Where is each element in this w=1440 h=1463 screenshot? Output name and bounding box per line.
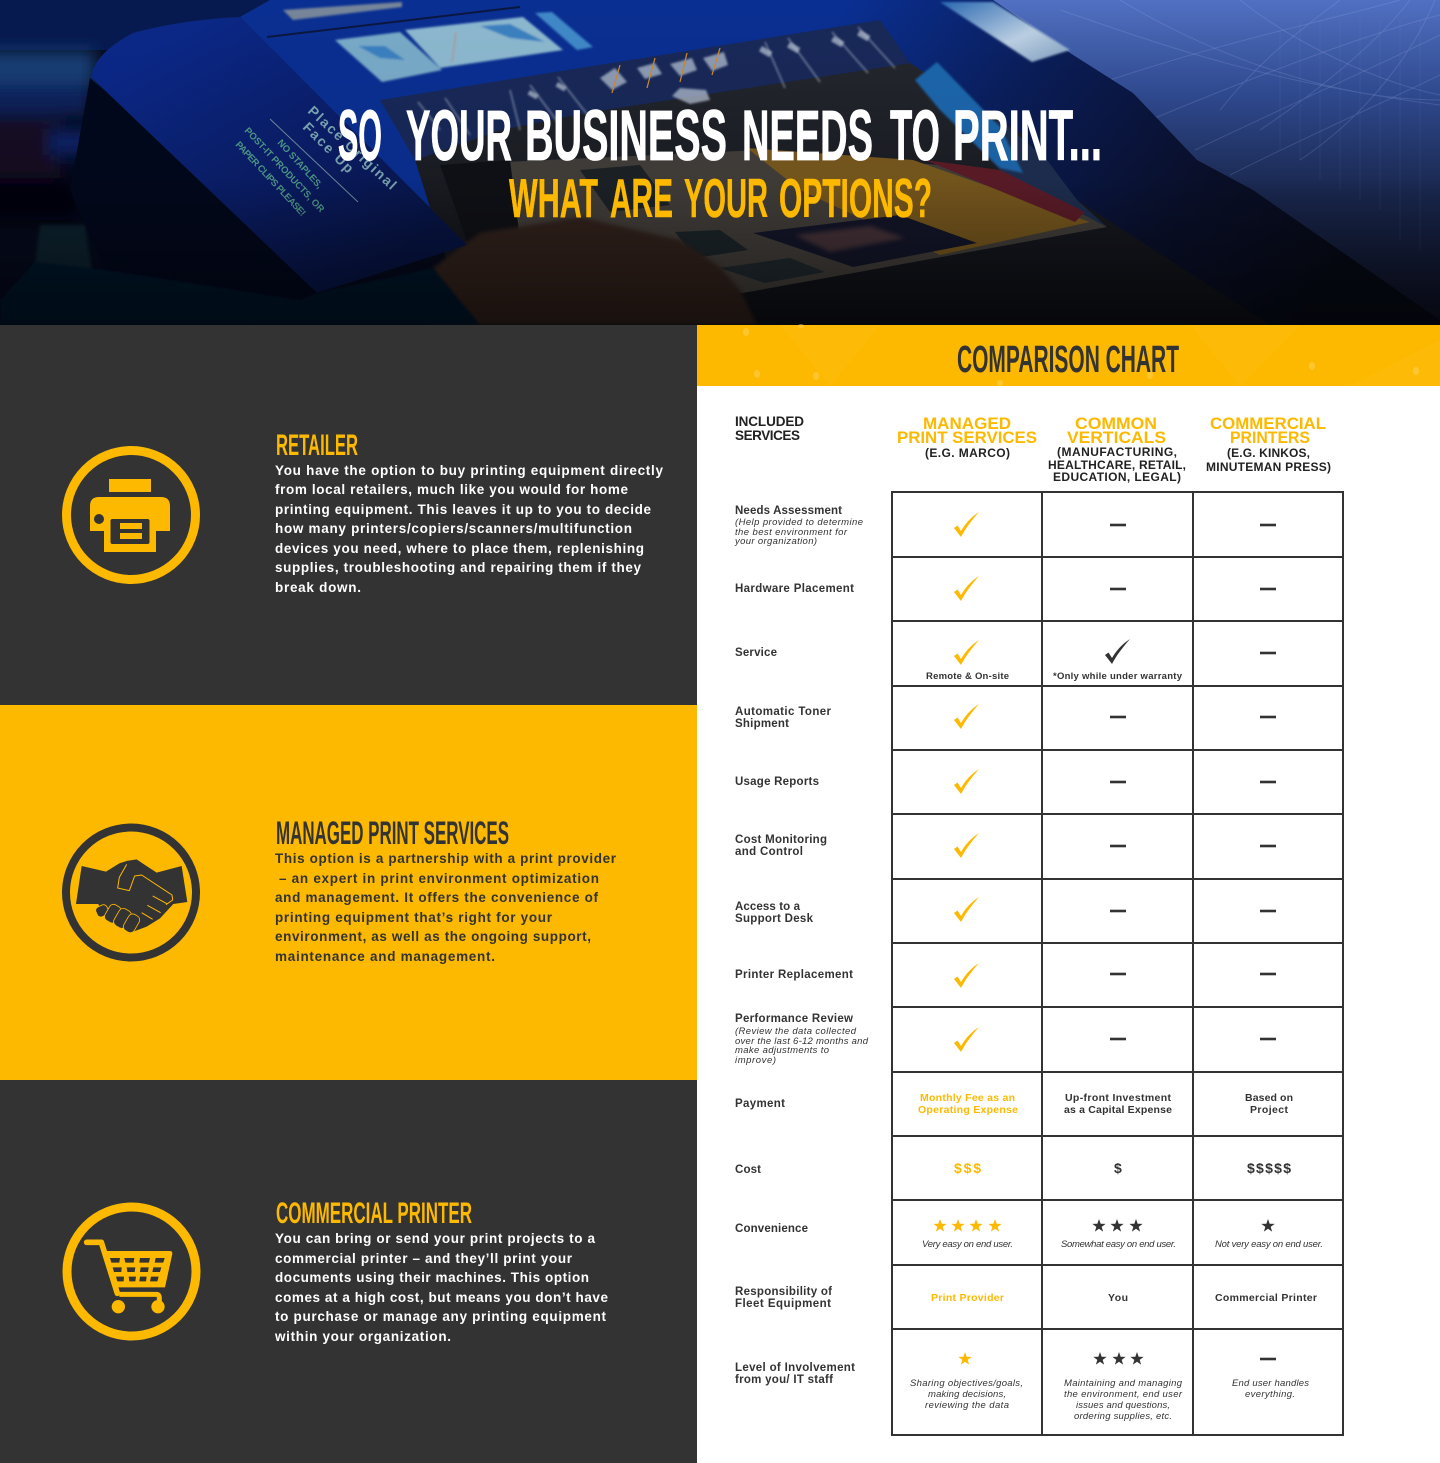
header: common verticals: VERTICALS	[1067, 428, 1166, 447]
panel: commercial printer	[0, 1080, 697, 1463]
row: performance review: improve)	[735, 1055, 776, 1066]
blue display window at right	[915, 62, 1023, 173]
comparison chart header band	[697, 324, 1440, 386]
row: payment: Up-front Investment	[1065, 1092, 1172, 1104]
row: performance review: make adjustments to	[735, 1045, 829, 1056]
row: service: Remote & On-site	[926, 671, 1009, 682]
row: level of involvement: from you/ IT staff	[735, 1374, 833, 1386]
row: access to a support desk: Support Desk	[735, 913, 814, 925]
subtitle: WHAT	[509, 167, 598, 229]
row: usage reports	[735, 769, 1276, 794]
row: payment: Project	[1250, 1104, 1288, 1116]
row: needs assessment: (Help provided to determine	[735, 517, 863, 528]
row: needs assessment	[734, 505, 1276, 547]
heading: COMMERCIAL PRINTER	[276, 1197, 472, 1230]
header: included services	[735, 414, 804, 443]
text block: from local retailers, much like you would for home	[275, 482, 628, 497]
icon: printer	[66, 450, 196, 580]
row: service	[735, 639, 1276, 682]
row: performance review: Performance Review	[735, 1013, 853, 1025]
header: common verticals: (MANUFACTURING,	[1057, 445, 1177, 459]
row: level of involvement: ordering supplies, etc.	[1074, 1411, 1172, 1422]
lid label text: Face Up	[300, 119, 357, 176]
header: common verticals: COMMON	[1075, 414, 1157, 433]
row: convenience: Somewhat easy on end user.	[1061, 1239, 1176, 1250]
header: managed print services: PRINT SERVICES	[897, 428, 1037, 447]
hand silhouette at far left	[0, 50, 100, 220]
row: cost: $	[1114, 1160, 1122, 1176]
printer lid	[92, 17, 467, 293]
row: responsibility of fleet equipment: Print Provider	[931, 1292, 1004, 1304]
row: level of involvement: End user handles	[1232, 1378, 1309, 1389]
text block: documents using their machines. This option	[275, 1270, 589, 1285]
row: hardware placement: Hardware Placement	[735, 583, 854, 595]
panel: retailer	[0, 325, 697, 705]
text block: to purchase or manage any printing equipment	[275, 1309, 606, 1324]
row: level of involvement: Maintaining and managing	[1064, 1378, 1183, 1389]
header: common verticals	[1048, 414, 1186, 484]
text block	[274, 1231, 608, 1344]
icon: shopping cart	[67, 1207, 196, 1336]
text block: commercial printer – and they’ll print your	[275, 1251, 573, 1266]
icon: handshake	[66, 828, 196, 958]
row: responsibility of fleet equipment: Fleet Equipment	[735, 1298, 831, 1310]
title: PRINT...	[953, 97, 1102, 176]
control panel	[380, 20, 910, 160]
row: level of involvement	[735, 1352, 1309, 1422]
header: commercial printers: (E.G. KINKOS,	[1227, 446, 1310, 460]
row: service: Service	[735, 647, 777, 659]
row: performance review	[735, 1013, 1276, 1066]
row: cost: $$$$$	[1247, 1160, 1291, 1176]
row: cost monitoring and control: and Control	[735, 846, 803, 858]
row: needs assessment: the best environment for	[735, 527, 848, 538]
row: cost	[735, 1160, 1291, 1176]
chart heading: COMPARISON CHART	[957, 339, 1179, 381]
row: cost: $$$	[954, 1160, 981, 1176]
hero banner: printer photo background	[0, 0, 1440, 325]
row: level of involvement: issues and questions,	[1076, 1400, 1170, 1411]
hand on the paper	[433, 217, 757, 325]
row: responsibility of fleet equipment	[735, 1286, 1317, 1310]
row: cost monitoring and control: Cost Monitoring	[735, 834, 827, 846]
row: needs assessment: your organization)	[734, 536, 817, 547]
row: access to a support desk	[735, 897, 1276, 925]
heading: MANAGED PRINT SERVICES	[276, 815, 509, 851]
printer body	[240, 0, 1440, 325]
row: service: *Only while under warranty	[1053, 671, 1183, 682]
row: performance review: (Review the data collected	[735, 1026, 857, 1037]
row: cost monitoring and control	[735, 833, 1276, 858]
header: included services: SERVICES	[735, 428, 800, 443]
title	[338, 97, 1102, 229]
header: managed print services: (E.G. MARCO)	[925, 446, 1010, 460]
panel: managed print services	[0, 705, 697, 1080]
row: level of involvement: Level of Involvement	[735, 1362, 855, 1374]
text block: and management. It offers the convenience of	[275, 890, 598, 905]
lid label text: POST-IT PRODUCTS, OR	[242, 126, 326, 215]
title: NEEDS	[742, 97, 873, 176]
text block: You can bring or send your print projects to a	[275, 1231, 595, 1246]
text block: supplies, troubleshooting and repairing them if they	[275, 560, 641, 575]
subtitle: OPTIONS?	[779, 167, 932, 229]
header: managed print services: MANAGED	[923, 414, 1011, 433]
row: payment: Monthly Fee as an	[920, 1092, 1015, 1104]
text block: environment, as well as the ongoing support,	[275, 929, 591, 944]
row: cost: Cost	[735, 1164, 761, 1176]
row: level of involvement: reviewing the data	[925, 1400, 1009, 1411]
panel display screens	[335, 12, 593, 82]
row: automatic toner shipment: Automatic Toner	[735, 706, 832, 718]
light strip at top	[940, 2, 1070, 62]
lid label text	[233, 102, 400, 219]
panel buttons	[418, 27, 895, 135]
row: payment: as a Capital Expense	[1064, 1104, 1172, 1116]
row: convenience: Not very easy on end user.	[1215, 1239, 1323, 1250]
header: included services: INCLUDED	[735, 414, 804, 429]
row: usage reports: Usage Reports	[735, 776, 819, 788]
row: convenience: Convenience	[735, 1223, 808, 1235]
text block: You have the option to buy printing equipment directly	[275, 463, 663, 478]
row: responsibility of fleet equipment: You	[1108, 1292, 1128, 1304]
text block: break down.	[275, 580, 361, 595]
header: commercial printers: COMMERCIAL	[1210, 414, 1326, 433]
subtitle	[509, 167, 932, 229]
text block: This option is a partnership with a print provider	[275, 851, 617, 866]
text block: how many printers/copiers/scanners/multifunction	[275, 521, 632, 536]
row: convenience	[735, 1219, 1323, 1250]
background wall with line pattern at top right	[993, 0, 1440, 325]
row: payment: Operating Expense	[918, 1104, 1018, 1116]
paper sheet	[440, 150, 1107, 293]
lid label text: NO STAPLES,	[275, 138, 324, 191]
lid label text: Place Original	[305, 102, 400, 193]
header: commercial printers	[1206, 414, 1331, 474]
title: BUSINESS	[525, 97, 727, 176]
title: YOUR	[406, 97, 512, 176]
text block	[275, 851, 617, 964]
title: SO	[338, 97, 382, 176]
subtitle: YOUR	[684, 167, 768, 229]
row: automatic toner shipment: Shipment	[735, 718, 789, 730]
text block: – an expert in print environment optimization	[279, 871, 599, 886]
row: printer replacement: Printer Replacement	[735, 969, 853, 981]
row: level of involvement: Sharing objectives/goals,	[910, 1378, 1023, 1389]
row: payment	[735, 1092, 1293, 1116]
row: access to a support desk: Access to a	[735, 901, 801, 913]
text block: within your organization.	[274, 1329, 451, 1344]
row: level of involvement: everything.	[1245, 1389, 1295, 1400]
header: common verticals: HEALTHCARE, RETAIL,	[1048, 458, 1186, 472]
row: payment: Based on	[1245, 1092, 1293, 1104]
row: level of involvement: making decisions,	[928, 1389, 1006, 1400]
sleeve in foreground	[0, 262, 480, 325]
printer paper bay	[415, 63, 1270, 325]
row: convenience: Very easy on end user.	[922, 1239, 1013, 1250]
text block: printing equipment that’s right for your	[275, 910, 553, 925]
header: commercial printers: PRINTERS	[1230, 428, 1310, 447]
lid label text: PAPER CLIPS PLEASE!	[233, 140, 308, 219]
header: commercial printers: MINUTEMAN PRESS)	[1206, 460, 1331, 474]
text block: devices you need, where to place them, replenishing	[275, 541, 644, 556]
title: TO	[890, 97, 940, 176]
text block: comes at a high cost, but means you don’t have	[275, 1290, 608, 1305]
subtitle: ARE	[610, 167, 673, 229]
row: needs assessment: Needs Assessment	[735, 505, 842, 517]
header: managed print services	[897, 414, 1037, 460]
chart column headers	[735, 414, 1331, 484]
row: hardware placement	[735, 576, 1276, 601]
row: responsibility of fleet equipment: Commercial Printer	[1215, 1292, 1317, 1304]
printer lid front face	[70, 78, 317, 300]
table grid	[892, 492, 1343, 1435]
row: responsibility of fleet equipment: Responsibility of	[735, 1286, 832, 1298]
row: automatic toner shipment	[735, 704, 1276, 730]
row: performance review: over the last 6-12 months and	[735, 1036, 869, 1047]
text block	[275, 463, 663, 595]
text block: printing equipment. This leaves it up to you to decide	[275, 502, 651, 517]
row: level of involvement: the environment, end user	[1064, 1389, 1183, 1400]
row: printer replacement	[735, 963, 1276, 988]
heading: RETAILER	[276, 429, 358, 462]
header: common verticals: EDUCATION, LEGAL)	[1053, 470, 1181, 484]
text block: maintenance and management.	[275, 949, 495, 964]
row: payment: Payment	[735, 1098, 785, 1110]
